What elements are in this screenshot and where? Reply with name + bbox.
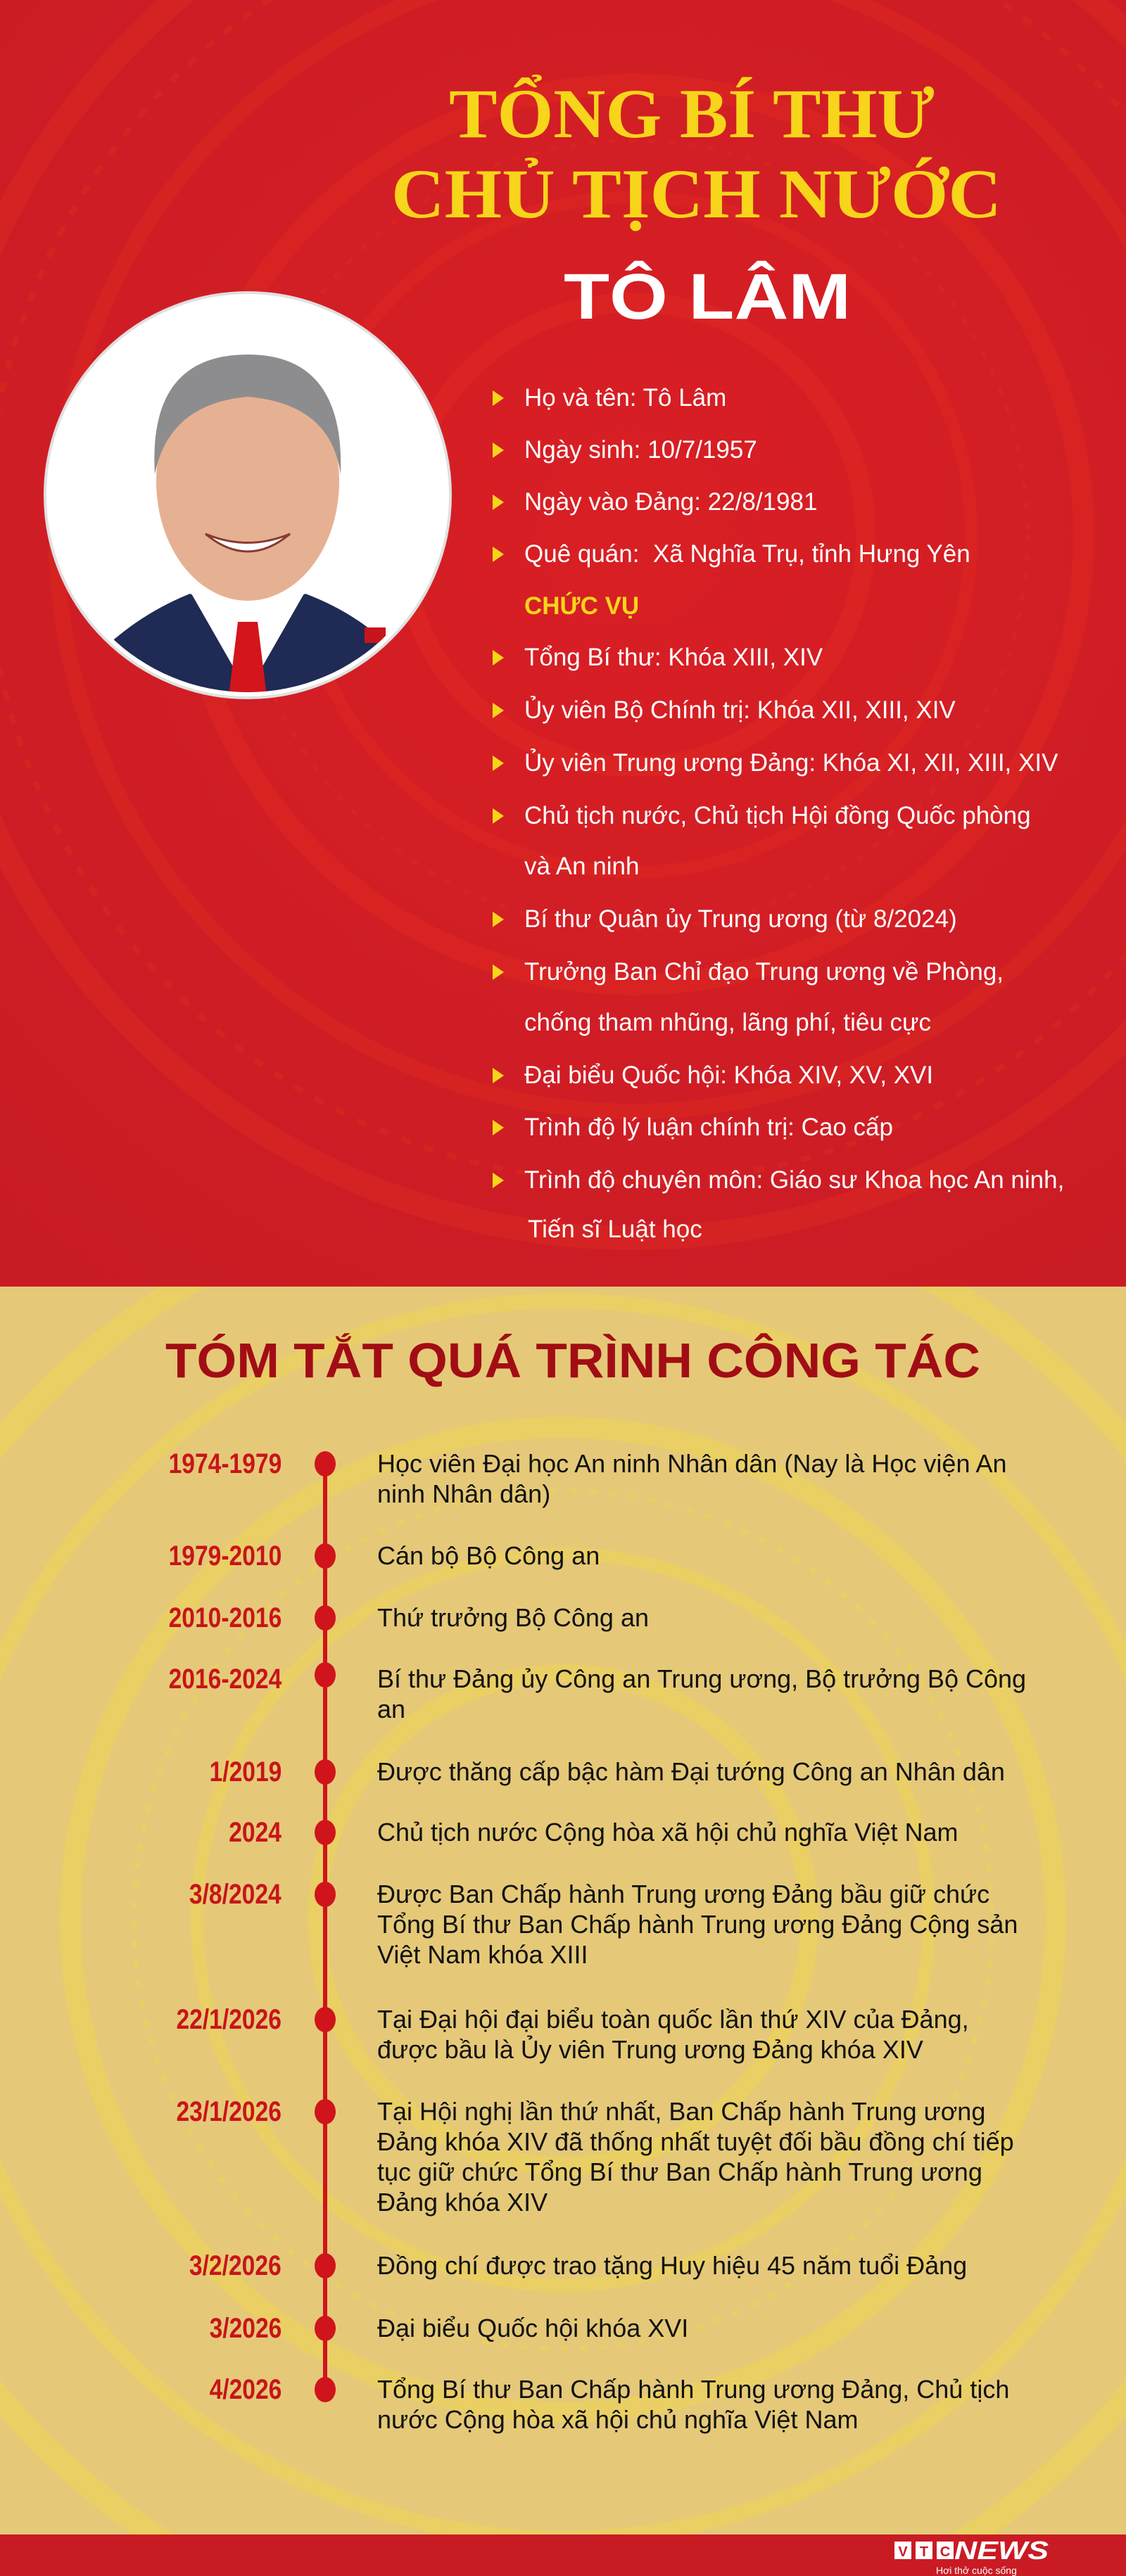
- text: Bí thư Quân ủy Trung ương (từ 8/2024): [524, 905, 957, 933]
- timeline: tục giữ chức Tổng Bí thư Ban Chấp hành Trung ương: [377, 2157, 982, 2186]
- timeline: Đảng khóa XIV: [377, 2188, 548, 2217]
- title: TÔ LÂM: [564, 260, 851, 333]
- timeline: Tại Đại hội đại biểu toàn quốc lần thứ XIV của Đảng,: [377, 2005, 969, 2034]
- timeline: nước Cộng hòa xã hội chủ nghĩa Việt Nam: [377, 2405, 858, 2434]
- timeline: 1974-1979: [168, 1448, 282, 1479]
- title: CHỦ TỊCH NƯỚC: [391, 155, 1001, 233]
- text: Ủy viên Trung ương Đảng: Khóa XI, XII, XIII, XIV: [524, 749, 1058, 777]
- timeline: 2024: [229, 1817, 282, 1848]
- timeline: 3/8/2024: [189, 1879, 282, 1910]
- timeline: ninh Nhân dân): [377, 1479, 550, 1508]
- footer with logo: T: [920, 2544, 928, 2560]
- timeline: Tại Hội nghị lần thứ nhất, Ban Chấp hành Trung ương: [377, 2097, 985, 2126]
- timeline: Chủ tịch nước Cộng hòa xã hội chủ nghĩa Việt Nam: [377, 1818, 959, 1847]
- timeline: Học viên Đại học An ninh Nhân dân (Nay là Học viện An: [377, 1449, 1007, 1478]
- text: Đại biểu Quốc hội: Khóa XIV, XV, XVI: [524, 1061, 933, 1089]
- timeline: được bầu là Ủy viên Trung ương Đảng khóa XIV: [377, 2035, 923, 2064]
- timeline: Tổng Bí thư Ban Chấp hành Trung ương Đảng Cộng sản: [377, 1910, 1018, 1939]
- timeline: Đảng khóa XIV đã thống nhất tuyệt đối bầu đồng chí tiếp: [377, 2127, 1014, 2156]
- timeline: Được Ban Chấp hành Trung ương Đảng bầu giữ chức: [377, 1880, 989, 1908]
- text: và An ninh: [524, 853, 639, 880]
- timeline: 1979-2010: [168, 1541, 282, 1571]
- timeline: 3/2026: [209, 2313, 282, 2344]
- timeline: Tổng Bí thư Ban Chấp hành Trung ương Đảng, Chủ tịch: [377, 2375, 1009, 2404]
- timeline: Việt Nam khóa XIII: [377, 1940, 588, 1969]
- heading: timeline: TÓM TẮT QUÁ TRÌNH CÔNG TÁC: [165, 1332, 980, 1388]
- footer with logo: Hơi thở cuộc sống: [936, 2565, 1017, 2576]
- text: chống tham nhũng, lãng phí, tiêu cực: [524, 1009, 931, 1036]
- text: Trưởng Ban Chỉ đạo Trung ương về Phòng,: [524, 958, 1004, 986]
- text: Tổng Bí thư: Khóa XIII, XIV: [524, 644, 823, 671]
- timeline: Cán bộ Bộ Công an: [377, 1541, 600, 1570]
- text: Trình độ chuyên môn: Giáo sư Khoa học An ninh,: [524, 1166, 1064, 1194]
- text: Ngày vào Đảng: 22/8/1981: [524, 488, 817, 516]
- timeline: 4/2026: [209, 2374, 282, 2405]
- text: CHỨC VỤ: [524, 592, 639, 620]
- text: Tiến sĩ Luật học: [528, 1216, 702, 1243]
- footer with logo: V: [898, 2544, 908, 2560]
- personal info list: [493, 384, 1064, 1243]
- text: Chủ tịch nước, Chủ tịch Hội đồng Quốc phòng: [524, 802, 1031, 829]
- timeline: Đồng chí được trao tặng Huy hiệu 45 năm tuổi Đảng: [377, 2251, 967, 2280]
- timeline: Được thăng cấp bậc hàm Đại tướng Công an Nhân dân: [377, 1757, 1005, 1786]
- timeline: 23/1/2026: [177, 2096, 282, 2127]
- timeline: 2010-2016: [168, 1602, 282, 1633]
- text: Quê quán: Xã Nghĩa Trụ, tỉnh Hưng Yên: [524, 540, 970, 568]
- text: Ngày sinh: 10/7/1957: [524, 436, 757, 464]
- panel: red header background: [0, 0, 1126, 1287]
- timeline: Thứ trưởng Bộ Công an: [377, 1603, 649, 1632]
- text: Trình độ lý luận chính trị: Cao cấp: [524, 1114, 893, 1141]
- timeline: an: [377, 1695, 405, 1723]
- timeline: Đại biểu Quốc hội khóa XVI: [377, 2314, 688, 2342]
- panel: yellow timeline background: [0, 1287, 1126, 2534]
- timeline: Bí thư Đảng ủy Công an Trung ương, Bộ trưởng Bộ Công: [377, 1664, 1026, 1693]
- text: Ủy viên Bộ Chính trị: Khóa XII, XIII, XIV: [524, 696, 956, 724]
- footer with logo: C: [940, 2544, 950, 2560]
- timeline: 22/1/2026: [177, 2004, 282, 2035]
- footer with logo: [0, 2534, 1126, 2576]
- title: TỔNG BÍ THƯ: [449, 75, 935, 153]
- timeline: 1/2019: [209, 1756, 282, 1787]
- portrait: [44, 291, 452, 699]
- footer with logo: NEWS: [954, 2536, 1049, 2565]
- title: [391, 75, 1001, 333]
- text: Họ và tên: Tô Lâm: [524, 384, 726, 412]
- timeline: 2016-2024: [168, 1664, 282, 1695]
- timeline: 3/2/2026: [189, 2250, 282, 2281]
